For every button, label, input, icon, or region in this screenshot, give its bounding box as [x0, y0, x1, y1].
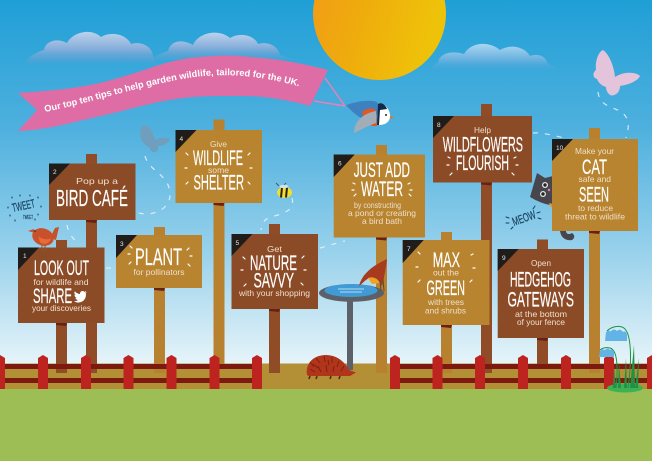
pink banner [18, 56, 328, 131]
cloud left [25, 32, 156, 63]
grass [0, 389, 652, 461]
sign 1: look out: your discoveries [32, 304, 91, 313]
board [116, 235, 202, 288]
banner title: Our top ten tips to help garden wildlife, tailored for the UK. [44, 68, 299, 112]
sign 4: wildlife shelter [176, 120, 262, 370]
sign 1: look out: SHARE [33, 285, 72, 308]
post [86, 154, 97, 373]
sign 4: wildlife shelter: 4 [180, 136, 184, 143]
sign 7: max out the green: and shrubs [425, 307, 466, 316]
fence left [0, 355, 262, 389]
sign 8: wildflowers flourish: WILDFLOWERS [443, 134, 523, 157]
sign 7: max out the green: out the [433, 269, 459, 278]
sign 9: hedgehog gateways: 9 [502, 255, 506, 262]
sign 2: bird cafe: BIRD CAFÉ [56, 185, 128, 211]
bee trail [261, 198, 293, 230]
robin on post [28, 225, 59, 251]
sign 1: look out: for wildlife and [34, 278, 89, 287]
sign 9: hedgehog gateways [498, 240, 584, 366]
board [49, 164, 136, 220]
board [433, 116, 532, 182]
meow label: MEOW [510, 207, 538, 229]
sparkle ticks [128, 246, 192, 266]
text: Make your [575, 147, 614, 156]
text: Pop up a [76, 177, 119, 186]
corner number [498, 249, 519, 271]
post [441, 232, 452, 373]
text: Help [474, 126, 491, 135]
corner number [552, 139, 573, 161]
cat tail [560, 231, 574, 240]
sign 2: bird cafe: 2 [53, 169, 57, 176]
tweet label: TWEET [11, 196, 36, 215]
text: Get [267, 245, 283, 254]
sign 10: cat safe and seen: to reduce [578, 204, 613, 213]
sign 10: cat safe and seen: 10 [556, 145, 564, 152]
sign 8: wildflowers flourish: 8 [437, 122, 441, 129]
pink butterfly trail [598, 92, 628, 138]
post [154, 227, 165, 373]
post [269, 224, 280, 373]
corner number [116, 235, 137, 258]
post [56, 240, 67, 373]
text: LOOK OUT [34, 257, 89, 280]
tweet label: TWEET [23, 215, 33, 221]
sign 9: hedgehog gateways: at the bottom [515, 310, 567, 319]
corner number [433, 116, 454, 138]
text: MAX [433, 249, 460, 272]
sign 10: cat safe and seen: safe and [578, 175, 611, 184]
text: Give [210, 140, 227, 149]
board [232, 234, 318, 309]
puffin flying [346, 101, 394, 133]
bird drinking at bath [359, 259, 387, 291]
text: PLANT [135, 244, 182, 271]
sign 9: hedgehog gateways: of your fence [517, 318, 565, 327]
sign 10: cat safe and seen: threat to wildlife [565, 212, 625, 222]
tweet label [8, 195, 41, 221]
sign 3: plant [116, 227, 202, 373]
trail near robin and sign 1 [67, 225, 114, 268]
trail toward sign 6 [320, 241, 345, 248]
sign 10: cat safe and seen: SEEN [579, 184, 609, 207]
sign 6: just add water: WATER [361, 178, 403, 201]
cloud middle [153, 33, 295, 60]
sign 5: nature savvy [232, 224, 318, 373]
sign 2: bird cafe [49, 154, 136, 373]
sign 5: nature savvy: NATURE [250, 252, 297, 275]
sign 9: hedgehog gateways: HEDGEHOG [510, 269, 571, 292]
corner number [176, 130, 196, 152]
post [376, 145, 387, 373]
board [552, 139, 638, 231]
fence right [390, 355, 652, 389]
sparkle ticks [352, 183, 412, 196]
sparkle ticks [241, 256, 306, 286]
corner number [334, 154, 355, 177]
sign 9: hedgehog gateways: GATEWAYS [508, 289, 574, 312]
sign 10: cat safe and seen [552, 128, 638, 373]
hedgehog [307, 355, 356, 379]
sparkle ticks [185, 153, 252, 184]
sign 7: max out the green: GREEN [426, 277, 465, 300]
post [481, 104, 492, 373]
sun [313, 0, 446, 80]
sign 6: just add water: by constructing [354, 201, 401, 210]
icon: twitter bird [74, 291, 87, 303]
bumble bee [276, 183, 292, 198]
sign 7: max out the green: with trees [427, 298, 464, 307]
sky background [0, 0, 652, 364]
sign 6: just add water: a pond or creating [348, 209, 416, 218]
post [537, 240, 548, 366]
sign 1: look out: 1 [23, 253, 27, 260]
sign 4: wildlife shelter: SHELTER [194, 172, 244, 194]
sign 6: just add water: a bird bath [362, 217, 402, 226]
bird bath [319, 284, 384, 370]
trail to wildflowers sign [533, 133, 564, 138]
sign 5: nature savvy: with your shopping [238, 289, 310, 298]
text: Open [531, 259, 551, 268]
sign 3: plant: for pollinators [134, 268, 184, 277]
corner number [403, 240, 424, 263]
meow label [506, 206, 541, 229]
butterfly trail blue [136, 156, 170, 214]
sign 6: just add water [334, 145, 425, 373]
sign 4: wildlife shelter: WILDLIFE [193, 147, 243, 170]
sparkle ticks [447, 157, 518, 175]
blue butterfly [140, 125, 170, 152]
sign 8: wildflowers flourish: FLOURISH [456, 152, 509, 175]
sign 8: wildflowers flourish [433, 104, 532, 373]
sign 6: just add water: 6 [338, 160, 342, 168]
sign 1: look out [18, 240, 104, 373]
post shadows under boards [56, 182, 600, 341]
soil band behind fence [0, 364, 652, 390]
text: JUST ADD [354, 159, 410, 182]
sparkle ticks [416, 252, 475, 282]
bluebells [599, 326, 643, 392]
sign 4: wildlife shelter: some [208, 166, 229, 175]
banner strings [314, 78, 345, 106]
sign 10: cat safe and seen: CAT [582, 156, 607, 179]
corner number [18, 248, 39, 270]
sign 5: nature savvy: SAVVY [254, 270, 294, 293]
post [589, 128, 600, 373]
board [334, 154, 425, 238]
sign 7: max out the green: 7 [407, 246, 411, 253]
corner number [49, 164, 70, 185]
sign 3: plant: 3 [120, 241, 124, 248]
corner number [232, 234, 252, 256]
board [403, 240, 490, 325]
board [176, 130, 262, 203]
board [18, 248, 104, 323]
cloud right [428, 44, 562, 70]
sign 7: max out the green [403, 232, 490, 373]
board [498, 249, 584, 338]
cat peeking behind sign [530, 173, 553, 208]
post [214, 120, 224, 370]
sign 5: nature savvy: 5 [236, 240, 240, 247]
pink butterfly [593, 50, 640, 95]
